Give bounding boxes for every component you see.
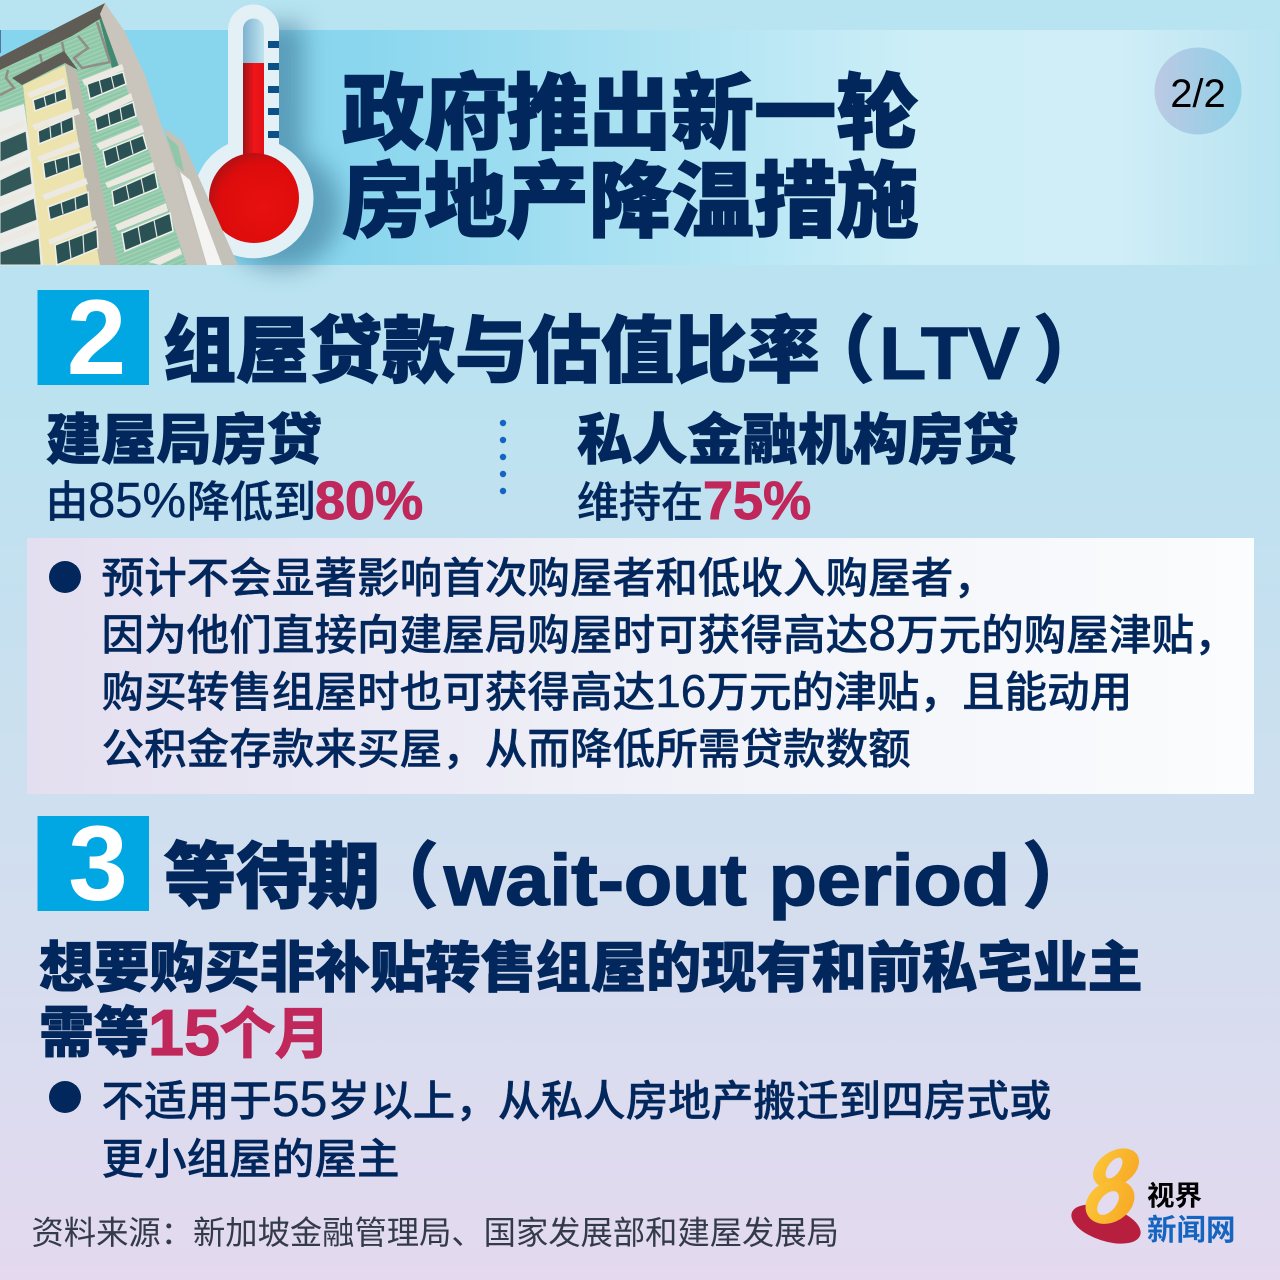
number box 3 xyxy=(38,803,149,923)
number box 2: 2 xyxy=(67,277,126,397)
statement: 15 month wait: 想要购买非补贴转售组屋的现有和前私宅业主 xyxy=(39,937,1143,999)
heading: section 2 xyxy=(163,311,1106,395)
column: private financial institutions loan: 维持在 xyxy=(577,479,703,526)
title xyxy=(342,68,919,248)
column: private financial institutions loan: 75% xyxy=(703,471,811,531)
building photo illustration xyxy=(0,3,238,265)
note text: 因为他们直接向建屋局购屋时可获得高达8万元的购屋津贴， xyxy=(102,605,1237,661)
note text: 公积金存款来买屋，从而降低所需贷款数额 xyxy=(102,726,911,774)
page badge 2/2: 2/2 xyxy=(1170,72,1226,116)
number box 3: 3 xyxy=(68,803,128,923)
heading: section 3: （ xyxy=(367,838,439,918)
column: HDB loan: 由 xyxy=(46,479,88,527)
heading: section 3 xyxy=(164,838,1094,921)
heading: section 3: ） xyxy=(1022,838,1094,918)
bullet xyxy=(49,1081,81,1113)
logo: 8world news xyxy=(1067,1140,1236,1251)
heading: section 2: （ xyxy=(802,311,875,392)
column: private financial institutions loan xyxy=(577,409,1018,531)
title: 政府推出新一轮 xyxy=(342,68,919,160)
heading: section 2: 组屋贷款与估值比率 xyxy=(163,311,820,392)
title: 房地产降温措施 xyxy=(342,156,919,248)
header band xyxy=(0,30,1280,265)
heading: section 3: wait-out period xyxy=(443,841,1010,921)
bullet xyxy=(49,561,81,593)
column: HDB loan xyxy=(46,409,423,531)
heading: section 2: LTV xyxy=(879,312,1020,395)
logo: 8world news: 新闻网 xyxy=(1147,1214,1236,1247)
note text: 购买转售组屋时也可获得高达16万元的津贴，且能动用 xyxy=(102,665,1132,717)
exemption note: 不适用于55岁以上，从私人房地产搬迁到四房式或 xyxy=(102,1071,1052,1127)
statement: 15 month wait: 个月 xyxy=(220,1003,330,1065)
number box 2 xyxy=(38,277,149,397)
statement: 15 month wait: 需等 xyxy=(39,1002,149,1064)
icon: thermometer xyxy=(194,5,341,269)
column: HDB loan: 85% xyxy=(88,474,186,528)
page badge 2/2 xyxy=(1154,48,1242,134)
heading: section 3: 等待期 xyxy=(164,838,380,918)
column: HDB loan: 建屋局房贷 xyxy=(46,409,322,471)
column: HDB loan: 降低到 xyxy=(187,479,316,527)
exemption note: 更小组屋的屋主 xyxy=(102,1136,400,1184)
statement: 15 month wait xyxy=(39,937,1143,1069)
divider dots xyxy=(500,420,506,494)
source: 资料来源：新加坡金融管理局、国家发展部和建屋发展局 xyxy=(32,1215,839,1251)
exemption note xyxy=(102,1071,1052,1184)
column: HDB loan: 80% xyxy=(315,471,423,531)
panel: HDB impact note xyxy=(27,538,1254,794)
column: private financial institutions loan: 私人金融机构房贷 xyxy=(577,409,1018,471)
note text xyxy=(102,555,1237,774)
note text: 预计不会显著影响首次购屋者和低收入购屋者， xyxy=(102,555,996,603)
logo: 8world news: 视界 xyxy=(1147,1180,1202,1211)
heading: section 2: ） xyxy=(1033,311,1106,392)
statement: 15 month wait: 15 xyxy=(148,996,220,1069)
